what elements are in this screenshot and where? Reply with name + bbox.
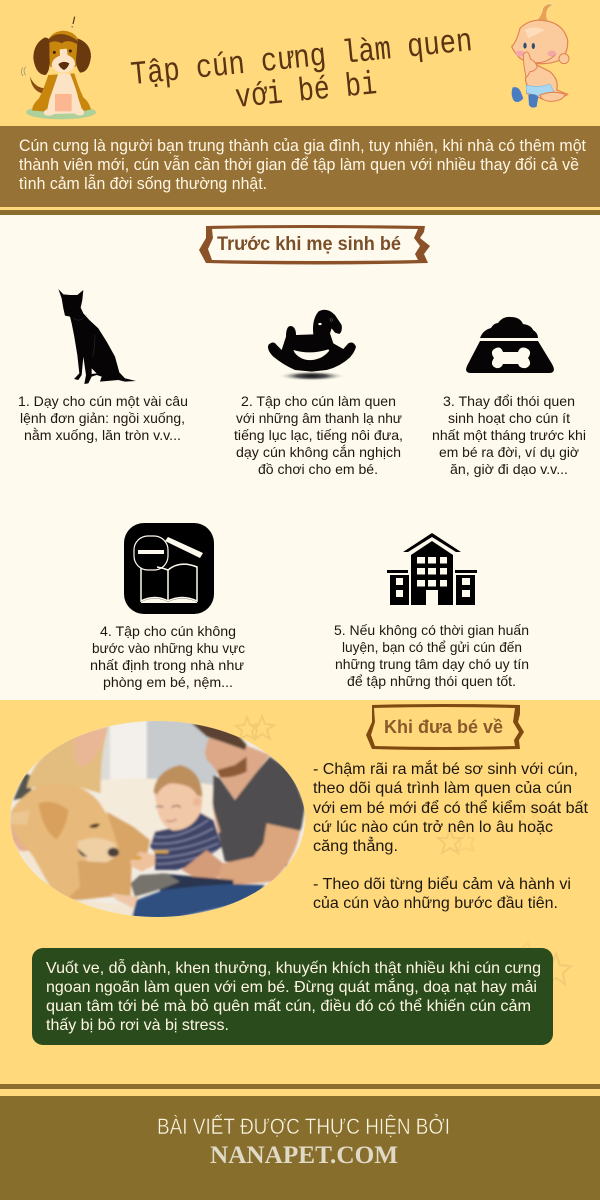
item 3 <box>432 393 586 477</box>
icon: baby <box>512 4 569 108</box>
item 2 <box>234 393 403 477</box>
icon: rocking horse <box>268 310 356 381</box>
item 4: 4. Tập cho cún không <box>100 623 236 639</box>
heading: bringing baby home <box>366 704 524 750</box>
footer: BÀI VIẾT ĐƯỢC THỰC HIỆN BỞI <box>157 1114 450 1139</box>
item 2: tiếng lục lạc, tiếng nôi đưa, <box>234 427 403 443</box>
panel: bringing baby home <box>0 704 589 1045</box>
heading: bringing baby home: Khi đưa bé về <box>384 717 503 737</box>
item 5: luyện, bạn có thể gửi cún đến <box>342 639 522 655</box>
item 2: 2. Tập cho cún làm quen <box>241 393 396 409</box>
title <box>129 23 474 117</box>
footer <box>0 1084 600 1200</box>
item 2: dạy cún không cắn nghịch <box>236 444 401 460</box>
item 4: phòng em bé, nệm... <box>103 674 233 690</box>
intro band: tình cảm lẫn đời sống thường nhật. <box>19 174 267 193</box>
text block: tips: - Theo dõi từng biểu cảm và hành vi <box>313 875 571 893</box>
item 1 <box>18 393 188 443</box>
icon: puppy <box>21 17 96 119</box>
title: Tập cún cưng làm quen <box>129 23 474 94</box>
item 4: nhất định trong nhà như <box>90 657 244 673</box>
text block: tips: cứ lúc nào cún trở nên lo âu hoặc <box>313 819 553 836</box>
item 2: với những âm thanh lạ như <box>236 410 402 426</box>
callout: advice: quan tâm tới bé mà bỏ quên mất cún, điều đó có thể khiến cún cảm <box>46 997 531 1015</box>
item 5 <box>334 622 529 689</box>
item 5: để tập những thói quen tốt. <box>347 673 516 689</box>
text block: tips: theo dõi quá trình làm quen của cún <box>313 780 572 797</box>
item 1: nằm xuống, lăn tròn v.v... <box>24 427 181 443</box>
panel: before birth <box>0 215 600 700</box>
text block: tips: của cún vào những bước đầu tiên. <box>313 895 558 912</box>
item 1: lệnh đơn giản: ngồi xuống, <box>20 410 185 426</box>
title: với bé bi <box>234 66 379 117</box>
heading: before birth: Trước khi mẹ sinh bé <box>217 234 401 255</box>
item 3: em bé ra đời, ví dụ giờ <box>439 444 579 460</box>
icon: sitting dog <box>58 289 136 384</box>
header section <box>21 4 569 119</box>
callout: advice: Vuốt ve, dỗ dành, khen thưởng, khuyến khích thật nhiều khi cún cưng <box>46 958 541 977</box>
item 4 <box>90 623 245 690</box>
item 4: bước vào những khu vực <box>92 640 245 656</box>
item 3: nhất một tháng trước khi <box>432 427 586 443</box>
text block: tips: - Chậm rãi ra mắt bé sơ sinh với cún, <box>313 759 578 778</box>
heading: before birth <box>199 225 430 264</box>
item 3: sinh hoạt cho cún ít <box>448 410 570 426</box>
item 3: 3. Thay đổi thói quen <box>443 393 575 409</box>
decorative stars <box>236 716 571 984</box>
item 1: 1. Dạy cho cún một vài câu <box>18 393 188 409</box>
callout: advice: thấy bị bỏ rơi và bị stress. <box>46 1017 229 1034</box>
photo: family with golden retriever <box>0 715 310 920</box>
text block: tips: căng thẳng. <box>313 836 398 855</box>
item 5: 5. Nếu không có thời gian huấn <box>334 622 529 638</box>
intro band: Cún cưng là người bạn trung thành của gia đình, tuy nhiên, khi nhà có thêm một <box>19 137 586 155</box>
text block: tips: với em bé mới để có thể kiểm soát bất <box>313 799 589 817</box>
text block: tips <box>313 759 589 912</box>
footer: NANAPET.COM <box>210 1142 398 1169</box>
icon: no entry book <box>124 523 214 614</box>
item 3: ăn, giờ đi dạo v.v... <box>450 461 568 477</box>
intro band <box>0 126 600 215</box>
item 5: những trung tâm dạy chó uy tín <box>335 656 529 672</box>
callout: advice <box>32 948 553 1045</box>
item 2: đồ chơi cho em bé. <box>258 461 378 477</box>
icon: school building <box>387 533 477 605</box>
callout: advice: ngoan ngoãn làm quen với em bé. Đừng quát mắng, doạ nạt hay mải <box>46 977 537 996</box>
icon: food bowl <box>466 317 554 373</box>
intro band: thành viên mới, cún vẫn cần thời gian để tập làm quen với nhiều thay đổi cả về <box>19 155 579 174</box>
